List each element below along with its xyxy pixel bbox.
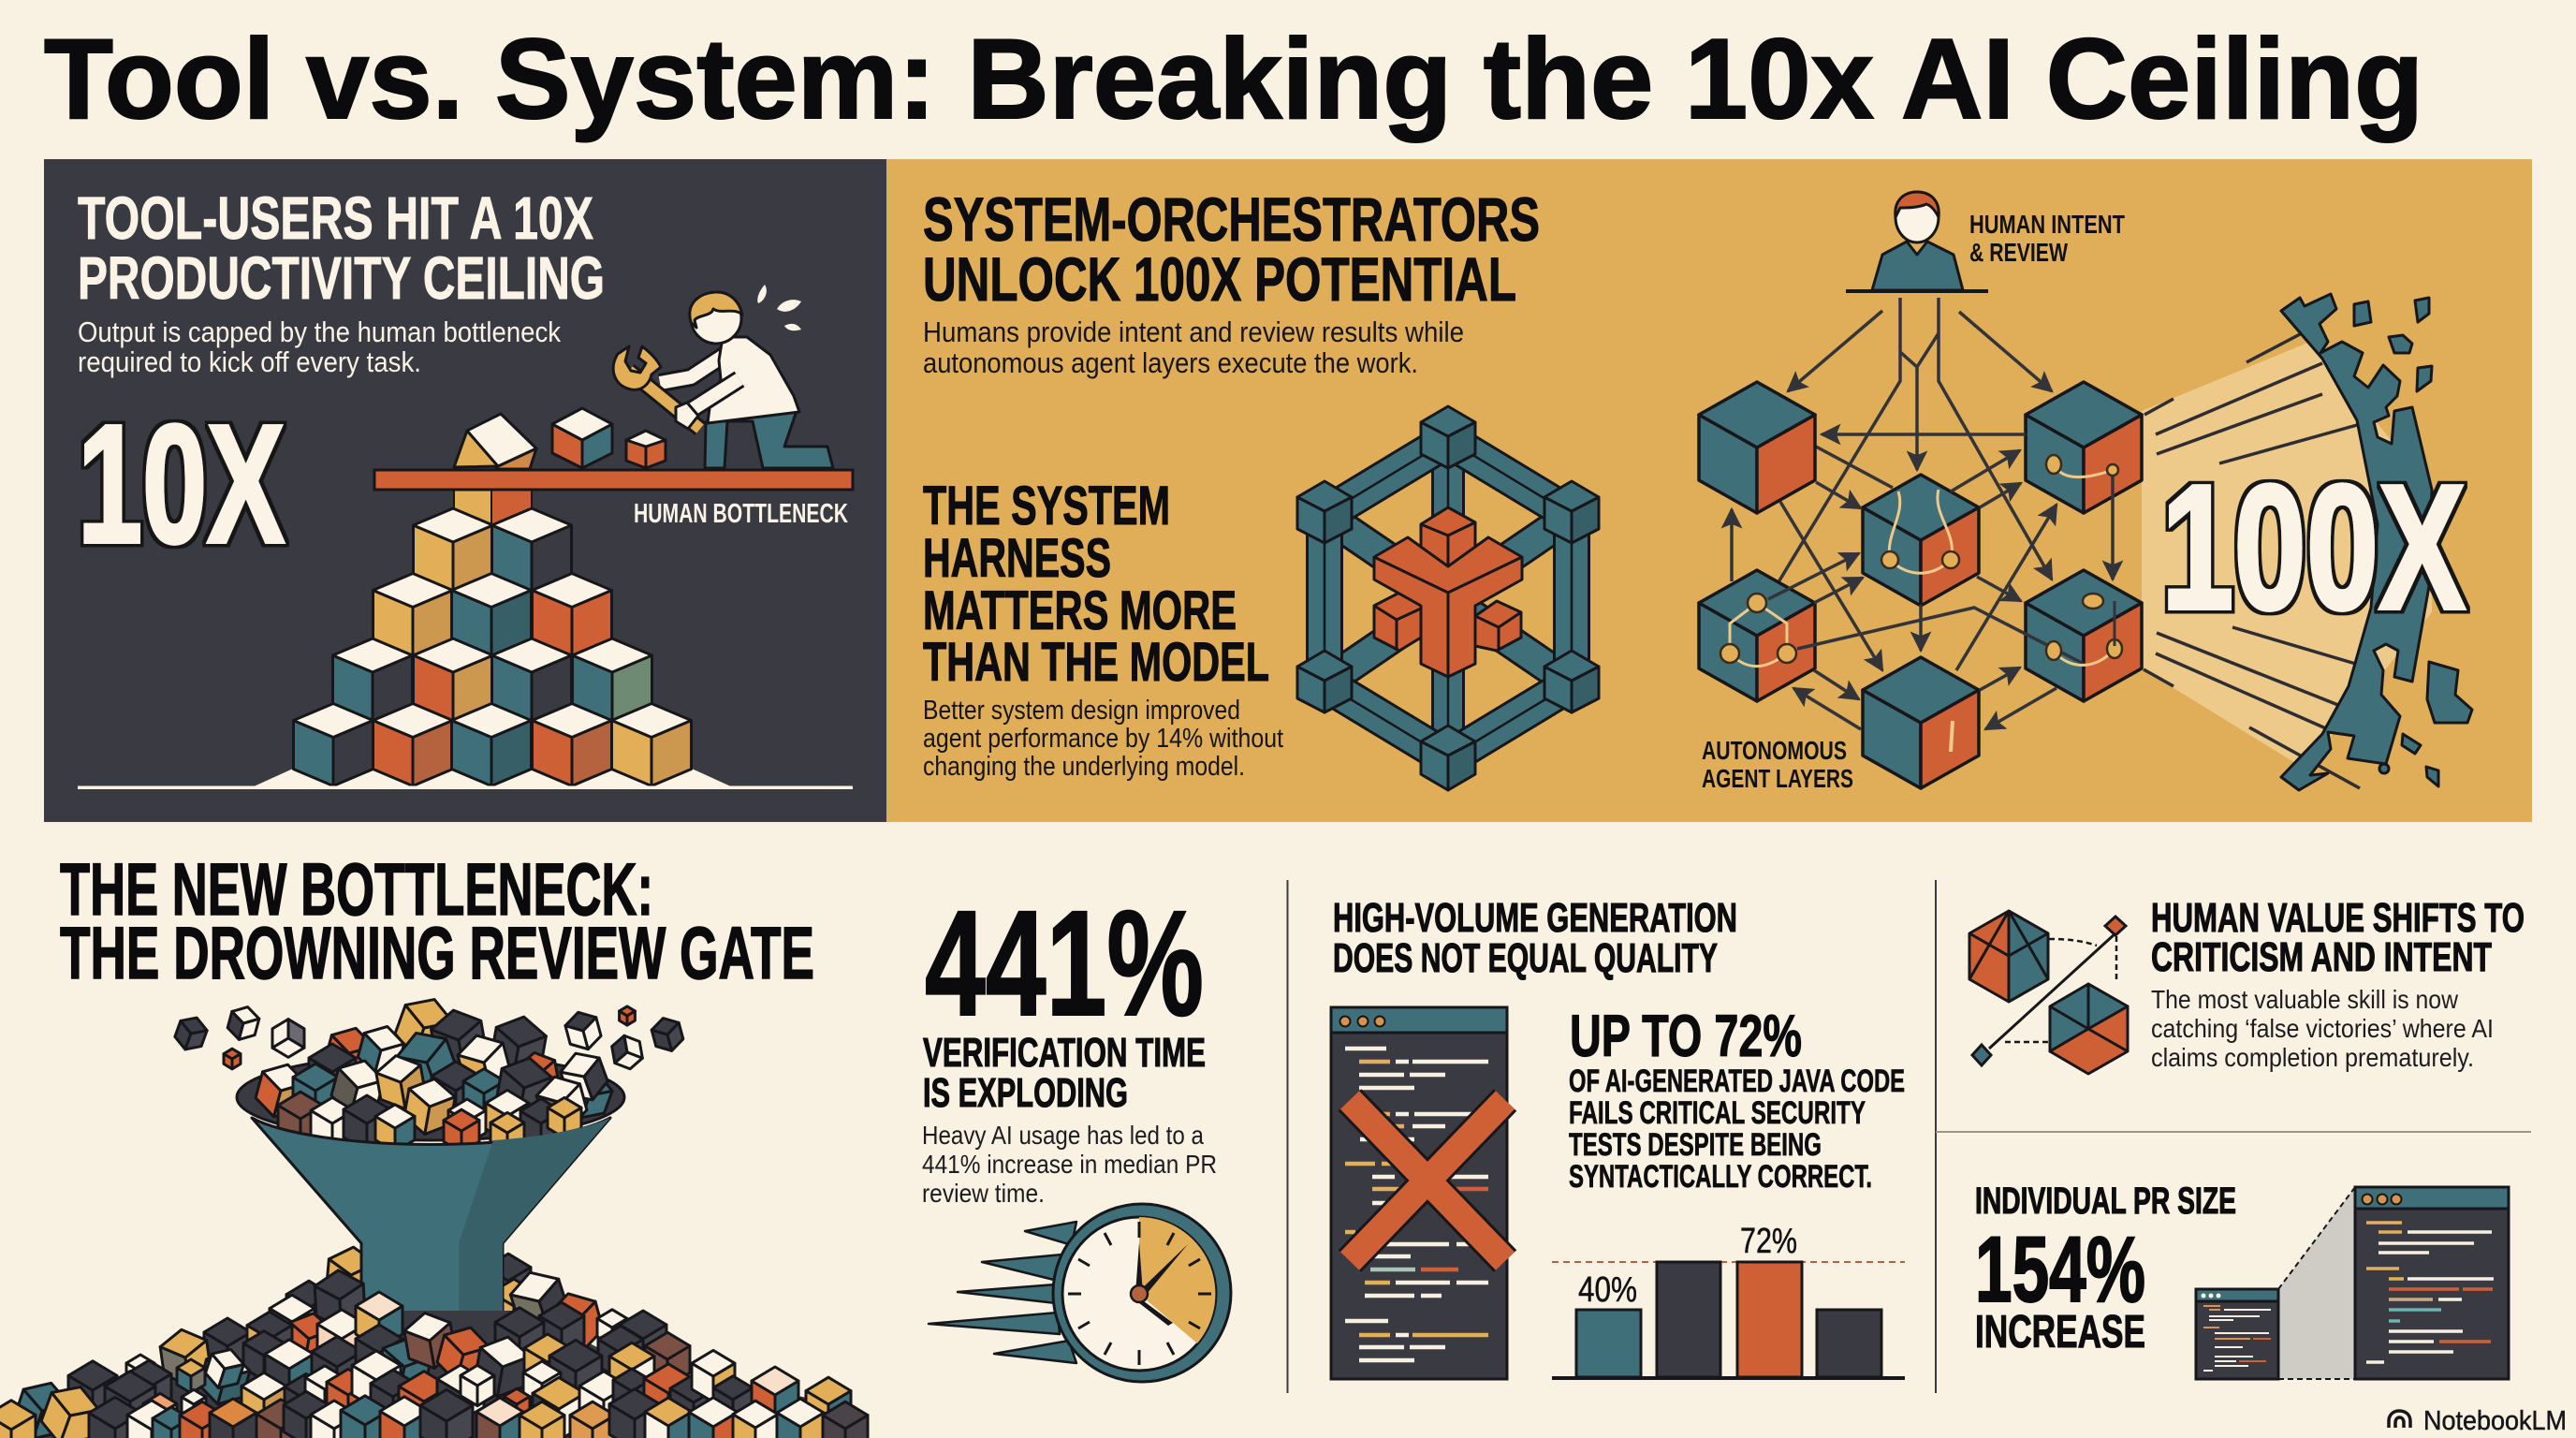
panel: tool-users: [44, 159, 886, 822]
panel: system-orchestrators: [886, 159, 2532, 822]
text: tool-users description: required to kick off every task.: [78, 345, 421, 378]
arrows: connections between cubes: [1732, 311, 2113, 729]
heading: the new bottleneck: THE NEW BOTTLENECK:: [60, 847, 653, 931]
icon: cube pyramid: [252, 487, 733, 787]
title: Tool vs. System: Breaking the 10x AI Ceiling: [44, 15, 2423, 142]
heading: system-orchestrators: UNLOCK 100X POTENTIAL: [923, 244, 1516, 314]
heading: the new bottleneck: THE DROWNING REVIEW GATE: [60, 911, 814, 994]
blocks in the funnel: [252, 990, 616, 1153]
label: human intent and review: [1969, 210, 2125, 267]
heading: tool-users: TOOL-USERS HIT A 10X: [78, 184, 593, 252]
text: verification description: [922, 1121, 1217, 1208]
icon: person with wrench: [613, 285, 833, 468]
text: verification description: 441% increase in median PR: [922, 1150, 1217, 1179]
text: java code security: SYNTACTICALLY CORRECT.: [1569, 1159, 1872, 1195]
human bottleneck plank: [374, 470, 853, 490]
icon: rejected code window: [1331, 1007, 1507, 1379]
text: java code security: [1569, 1064, 1905, 1195]
icon: red cross: [1350, 1100, 1505, 1261]
heading: system harness: [923, 476, 1269, 693]
heading: system harness: HARNESS: [923, 528, 1111, 589]
text: human value description: catching ‘false victories’ where AI: [2151, 1014, 2494, 1043]
stat: 441 percent: 441%: [925, 879, 1204, 1047]
text: human value description: claims completion prematurely.: [2151, 1043, 2474, 1072]
big number: 10X: 10X: [78, 390, 285, 579]
label: increase: INCREASE: [1975, 1307, 2145, 1357]
pile of blocks: [0, 1265, 868, 1438]
heading: system-orchestrators: SYSTEM-ORCHESTRATORS: [923, 184, 1540, 254]
icon: human reviewer: [1872, 192, 1963, 290]
icon: orange core: [1374, 507, 1522, 677]
icon: critic hexagons: [1969, 911, 2128, 1074]
heading: tool-users: PRODUCTIVITY CEILING: [78, 244, 605, 312]
big number: 100X: 100X: [2161, 448, 2466, 647]
heading: system harness: THAN THE MODEL: [923, 632, 1269, 693]
label: human intent and review: HUMAN INTENT: [1969, 210, 2125, 239]
label: autonomous agent layers: [1702, 736, 1853, 793]
heading: the new bottleneck: [60, 847, 814, 994]
pile behind the funnel: [286, 1245, 536, 1335]
heading: high-volume generation: DOES NOT EQUAL QUALITY: [1333, 935, 1718, 981]
icon: agent cubes: [1699, 382, 2142, 788]
label: human intent and review: & REVIEW: [1969, 238, 2068, 267]
text: java code security: OF AI-GENERATED JAVA CODE: [1569, 1064, 1905, 1099]
text: tool-users description: Output is capped by the human bottleneck: [78, 315, 561, 348]
heading: high-volume generation: HIGH-VOLUME GENERATION: [1333, 895, 1737, 941]
text: human value description: The most valuable skill is now: [2151, 985, 2459, 1014]
heading: system-orchestrators: [923, 184, 1540, 314]
label: autonomous agent layers: AUTONOMOUS: [1702, 736, 1847, 765]
ground line: [78, 786, 853, 789]
heading: individual pr size: INDIVIDUAL PR SIZE: [1975, 1181, 2236, 1222]
text: harness description: agent performance by 14% without: [923, 724, 1283, 754]
icon: speeding clock: [929, 1204, 1231, 1382]
funnel body: [252, 1118, 610, 1343]
blocks on the plank: [454, 408, 666, 469]
text: orchestrators description: [923, 315, 1464, 379]
label: 40 percent: 40%: [1578, 1270, 1637, 1310]
text: verification description: review time.: [922, 1179, 1045, 1208]
icon: 100x burst and broken wall: [2142, 294, 2472, 790]
heading: verification time: VERIFICATION TIME: [923, 1030, 1206, 1076]
text: tool-users description: [78, 315, 561, 378]
icon: small and large pull request windows: [2196, 1187, 2509, 1379]
bar chart: security failure rates: [1552, 1222, 1905, 1378]
label: 72 percent: 72%: [1740, 1222, 1797, 1261]
heading: tool-users: [78, 184, 605, 312]
text: human value description: [2151, 985, 2494, 1072]
icon: system harness lattice: [1297, 406, 1599, 790]
icon: funnel with overflowing code blocks: [0, 990, 868, 1438]
stat: up to 72 percent: UP TO 72%: [1570, 1004, 1802, 1069]
heading: system harness: THE SYSTEM: [923, 476, 1170, 536]
text: java code security: TESTS DESPITE BEING: [1569, 1127, 1822, 1163]
heading: verification time: IS EXPLODING: [923, 1070, 1128, 1116]
heading: system harness: MATTERS MORE: [923, 580, 1237, 641]
funnel rim: [237, 1054, 624, 1140]
heading: human value shifts: [2151, 895, 2525, 980]
text: java code security: FAILS CRITICAL SECURITY: [1569, 1095, 1866, 1131]
label: human bottleneck: HUMAN BOTTLENECK: [634, 499, 848, 529]
text: orchestrators description: Humans provide intent and review results while: [923, 315, 1464, 348]
icon: circuit traces on cubes: [1720, 455, 2122, 667]
flying blocks: [172, 1004, 685, 1071]
heading: verification time: [923, 1030, 1206, 1116]
text: harness description: Better system design improved: [923, 696, 1240, 726]
diagram: autonomous agent network: [1699, 192, 2142, 793]
arrows: connections behind cubes: [1771, 298, 2056, 670]
label: autonomous agent layers: AGENT LAYERS: [1702, 764, 1853, 793]
text: verification description: Heavy AI usage has led to a: [922, 1121, 1204, 1150]
logo: NotebookLM: NotebookLM: [2423, 1406, 2567, 1436]
text: harness description: [923, 696, 1283, 782]
text: orchestrators description: autonomous agent layers execute the work.: [923, 346, 1418, 379]
heading: high-volume generation: [1333, 895, 1737, 981]
text: harness description: changing the underlying model.: [923, 752, 1245, 782]
stat: 154 percent: 154%: [1975, 1217, 2145, 1321]
